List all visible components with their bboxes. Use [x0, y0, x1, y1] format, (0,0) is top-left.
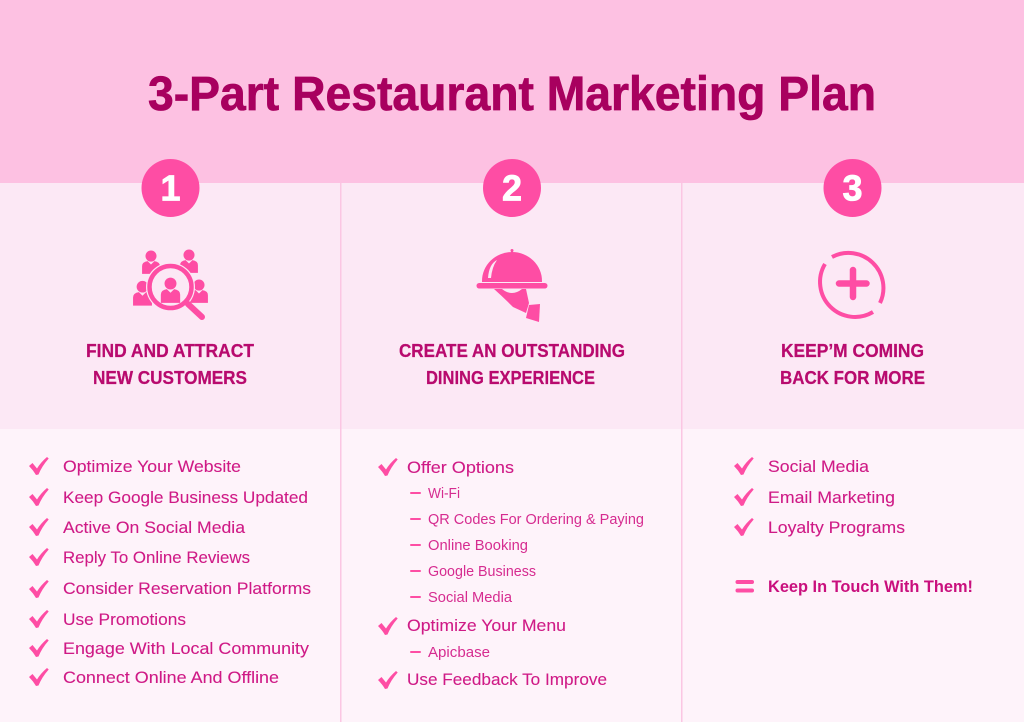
- heading 1: FIND AND ATTRACT: [86, 341, 254, 361]
- checklist 1: Keep Google Business Updated: [63, 488, 308, 507]
- checklist 2: Offer Options: [407, 458, 514, 477]
- background: middle band: [0, 183, 1024, 429]
- heading 3: KEEP’M COMING: [781, 341, 924, 361]
- heading 1: [86, 341, 254, 388]
- checklist 2: Optimize Your Menu: [407, 616, 566, 635]
- heading 1: NEW CUSTOMERS: [93, 368, 247, 388]
- checklist 1: Active On Social Media: [63, 518, 246, 537]
- number badge 3: 3: [842, 168, 863, 208]
- checklist 1: Reply To Online Reviews: [63, 548, 250, 567]
- panel: column 1: [29, 159, 311, 687]
- heading 3: BACK FOR MORE: [780, 368, 925, 388]
- checklist 2: Google Business: [428, 564, 536, 580]
- panel: column 2: [378, 159, 644, 689]
- background: lower band: [0, 429, 1024, 722]
- checklist 2: Wi-Fi: [428, 486, 460, 502]
- number badge 2: 2: [502, 168, 522, 208]
- number badge 1: [142, 159, 200, 217]
- checklist 2: Use Feedback To Improve: [407, 670, 607, 689]
- icon: circled plus: [820, 253, 883, 317]
- icon: waiter hand with cloche: [476, 249, 548, 322]
- icon: magnifier over customers: [133, 250, 208, 317]
- checklist 1: Optimize Your Website: [63, 457, 241, 476]
- title: 3-Part Restaurant Marketing Plan: [148, 68, 876, 121]
- checklist 3: Social Media: [768, 457, 870, 476]
- background: header band: [0, 0, 1024, 183]
- heading 2: DINING EXPERIENCE: [426, 368, 595, 388]
- checklist 2: Apicbase: [428, 645, 490, 661]
- number badge 1: 1: [160, 168, 181, 208]
- checklist 1: Engage With Local Community: [63, 639, 310, 658]
- checklist 2: Social Media: [428, 590, 513, 606]
- checklist 1: Use Promotions: [63, 610, 186, 629]
- checklist 3: Loyalty Programs: [768, 518, 905, 537]
- checklist 2: QR Codes For Ordering & Paying: [428, 512, 644, 528]
- heading 2: [399, 341, 625, 388]
- checklist 3: Email Marketing: [768, 488, 895, 507]
- checklist 3: [734, 457, 905, 537]
- number badge 3: [824, 159, 882, 217]
- checklist 1: Consider Reservation Platforms: [63, 579, 311, 598]
- heading 3: [780, 341, 925, 388]
- summary: keep in touch: Keep In Touch With Them!: [768, 577, 973, 596]
- checklist 1: Connect Online And Offline: [63, 668, 279, 687]
- heading 2: CREATE AN OUTSTANDING: [399, 341, 625, 361]
- checklist 2: [378, 458, 644, 689]
- checklist 1: [29, 457, 311, 687]
- checklist 2: Online Booking: [428, 538, 528, 554]
- panel: column 3: [734, 159, 973, 596]
- number badge 2: [483, 159, 541, 217]
